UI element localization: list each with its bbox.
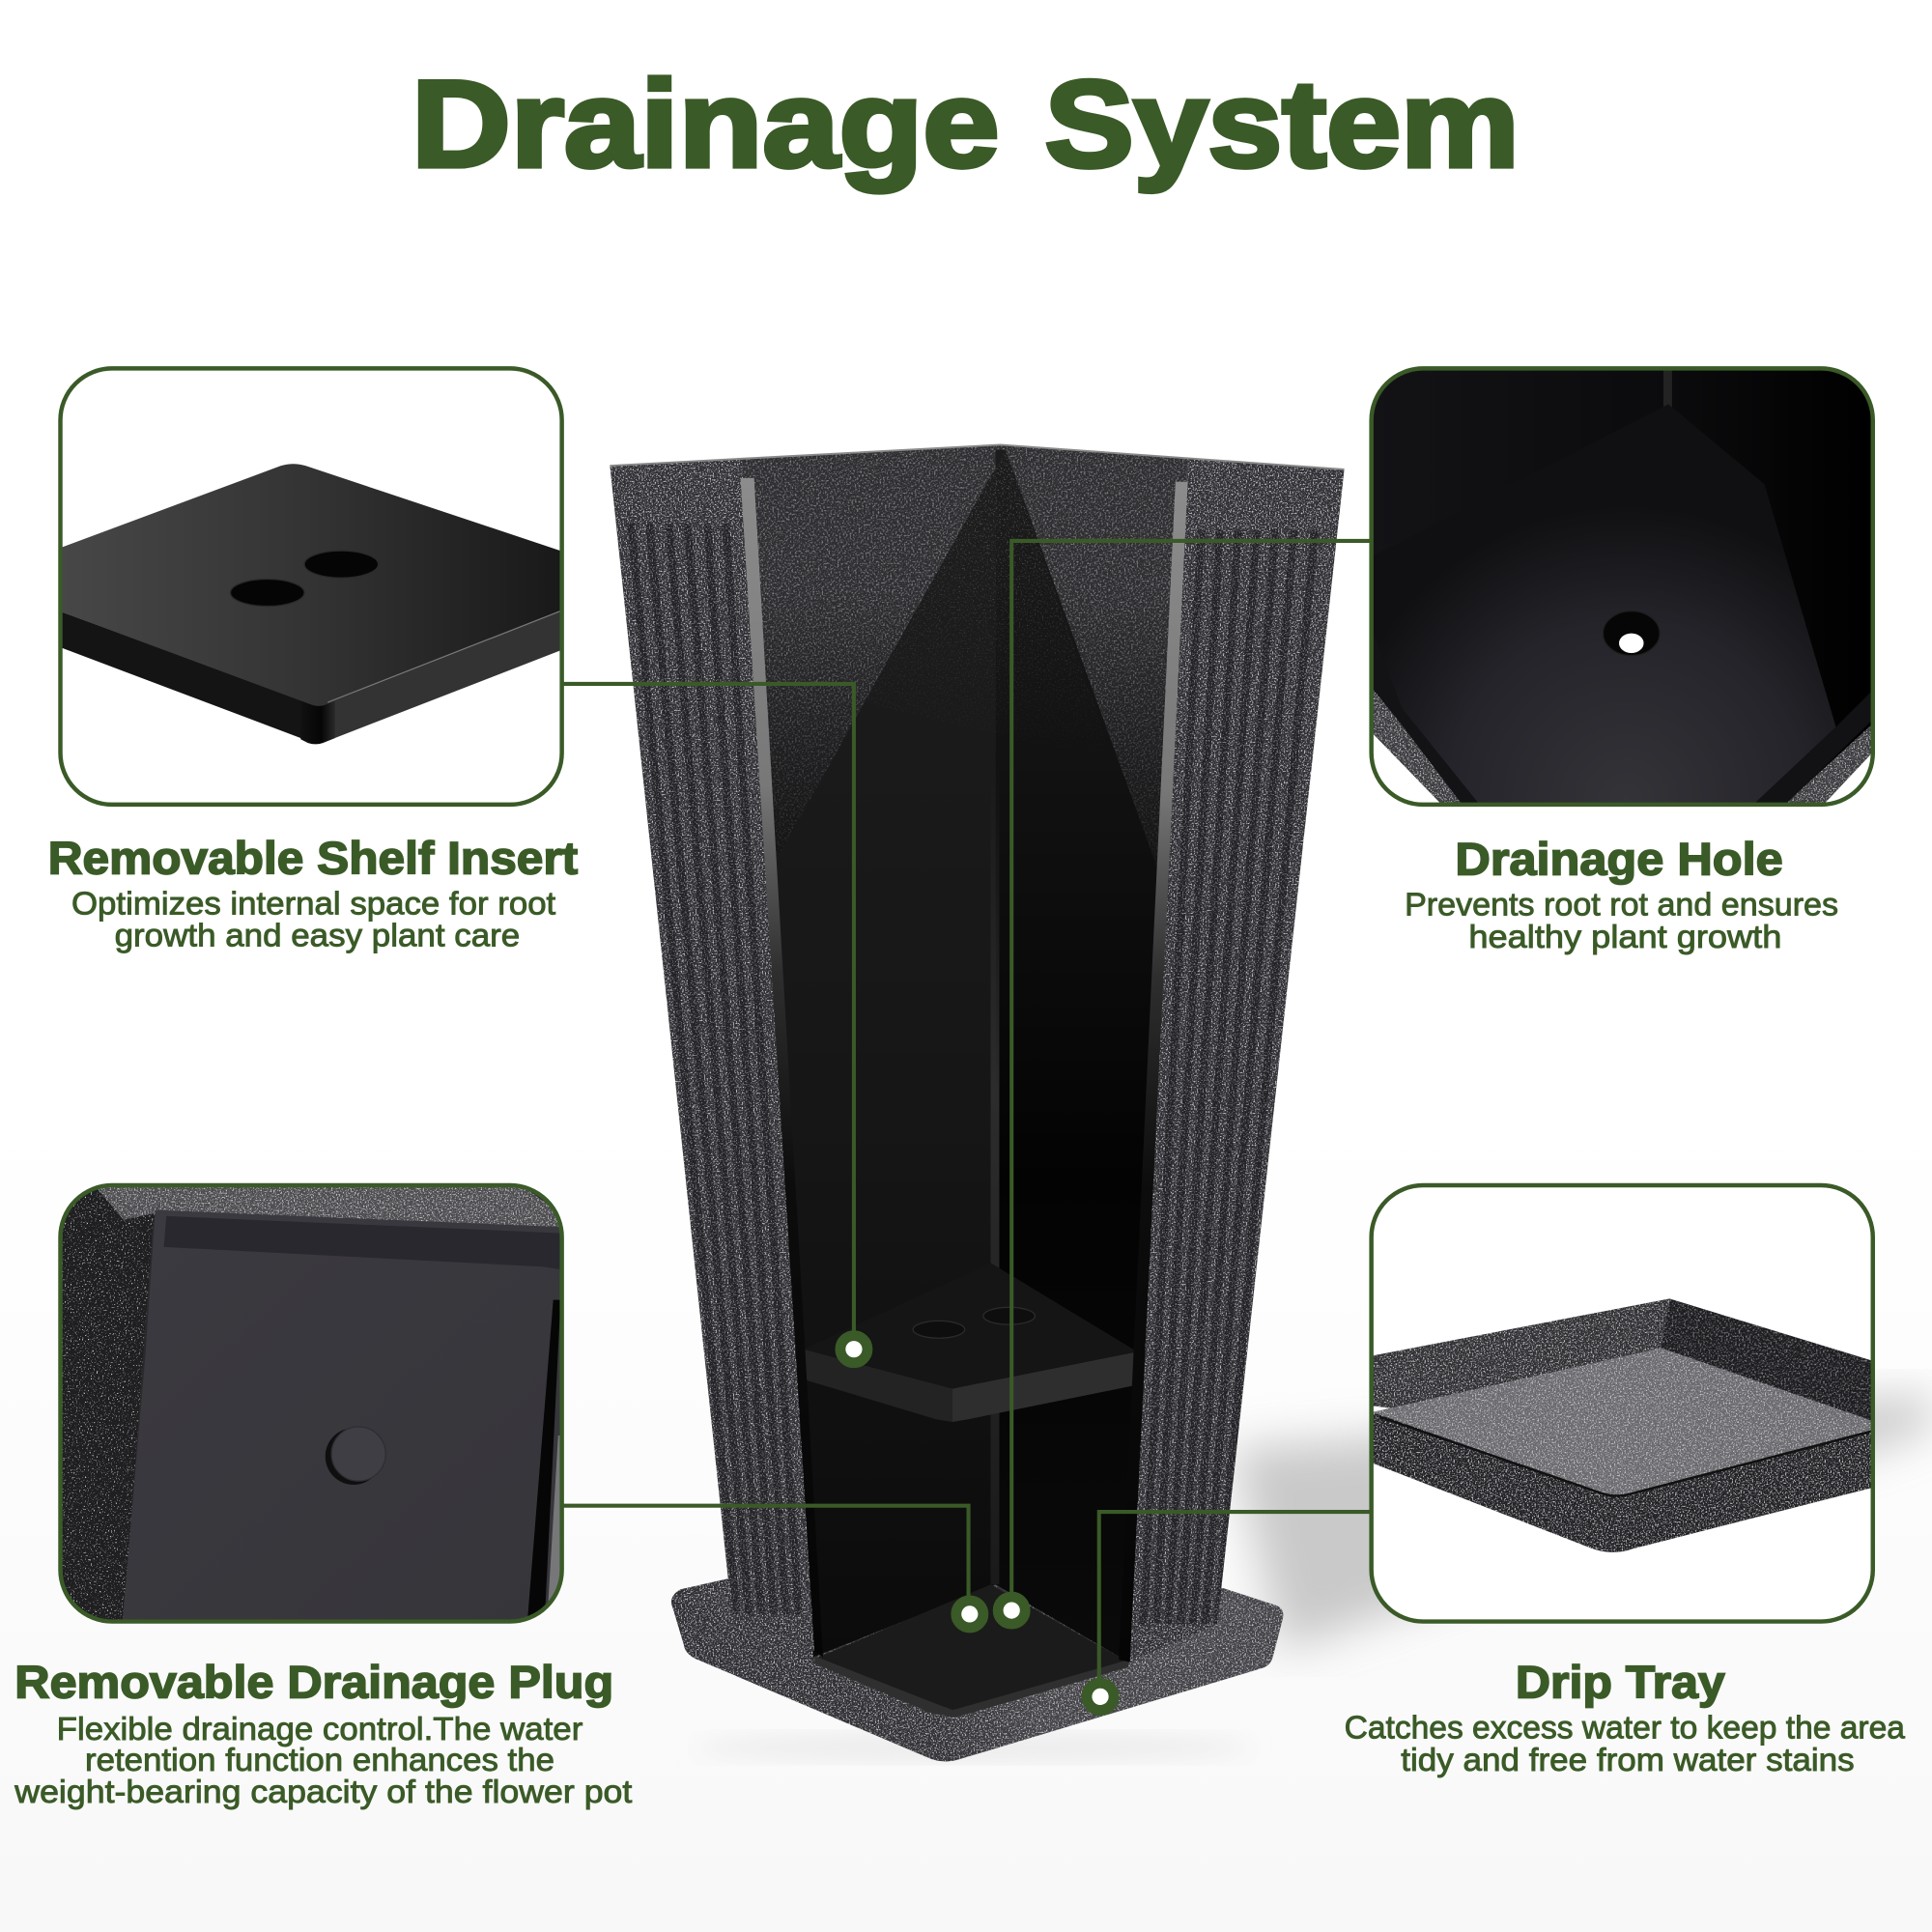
tray inner corner left	[681, 1583, 734, 1619]
tray back wall right	[1661, 1298, 1879, 1430]
speckled rim left	[1374, 690, 1461, 803]
text block: removable shelf insert	[48, 833, 579, 954]
shelf left face	[804, 1350, 952, 1422]
planter cutaway illustration	[610, 444, 1345, 1762]
back wall shade	[754, 591, 1182, 899]
interior left panel	[770, 450, 1006, 1658]
drip tray body	[671, 1578, 1283, 1761]
title	[412, 56, 1520, 193]
title: System	[1045, 56, 1520, 193]
plug recess	[164, 1216, 567, 1270]
text block: removable drainage plug: retention function enhances the	[85, 1743, 554, 1778]
text block: removable drainage plug: Flexible drainage control.The water	[57, 1712, 582, 1747]
tray back wall left	[1361, 1298, 1669, 1409]
text block: removable shelf insert: Removable Shelf Insert	[48, 833, 579, 884]
panel: drainage hole	[1361, 368, 1886, 807]
plate highlight	[327, 611, 560, 703]
pot rim highlight	[610, 444, 1345, 469]
callout line: drainage plug	[562, 1506, 983, 1628]
shelf right face	[952, 1351, 1137, 1422]
text block: drainage hole: healthy plant growth	[1468, 920, 1781, 955]
right light sliver	[547, 1435, 567, 1622]
plug panel	[122, 1210, 567, 1627]
drip tray shadow	[696, 1732, 1251, 1762]
shelf plate left edge	[62, 612, 302, 738]
inner rim line	[1380, 1417, 1879, 1495]
shelf plate corner	[300, 701, 335, 744]
text block: drainage hole	[1405, 835, 1838, 955]
text block: removable drainage plug: Removable Drainage Plug	[14, 1658, 613, 1709]
text block: drainage hole: Prevents root rot and ensures	[1405, 888, 1838, 923]
panel: removable shelf insert	[49, 368, 579, 805]
inner wall lower	[1396, 717, 1464, 803]
panel: removable drainage plug	[55, 1180, 567, 1627]
speckled rim right	[1787, 725, 1871, 803]
speckled wall	[62, 1190, 155, 1619]
tray front wall	[1361, 1408, 1879, 1552]
pot floor	[815, 1584, 1128, 1710]
speckled top band	[99, 1187, 558, 1227]
shelf plate top	[49, 464, 579, 706]
white corner left	[1374, 734, 1439, 803]
cast shadow	[1233, 1395, 1932, 1651]
text block: removable shelf insert: Optimizes internal space for root	[71, 886, 555, 922]
corner seam	[1663, 371, 1672, 408]
text block: drip tray: Catches excess water to keep the area	[1345, 1711, 1905, 1747]
white corner right	[1826, 754, 1870, 802]
callout line: shelf insert	[562, 684, 867, 1363]
left fluted wall	[610, 458, 823, 1658]
callout line: drip tray	[1087, 1512, 1370, 1710]
wedge speckle	[863, 450, 1115, 764]
right dark strip	[527, 1300, 560, 1622]
pot floor	[1372, 404, 1836, 804]
interior right panel	[996, 450, 1164, 1662]
pot back wall	[742, 444, 1188, 1665]
tray inner corner right	[1217, 1591, 1275, 1629]
text block: removable drainage plug: weight-bearing capacity of the flower pot	[14, 1775, 632, 1810]
plate hole one	[231, 579, 304, 607]
text block: drip tray: Drip Tray	[1516, 1658, 1725, 1709]
text block: drainage hole: Drainage Hole	[1455, 835, 1783, 886]
shelf hole two	[983, 1307, 1035, 1324]
callout line: drainage hole	[998, 541, 1370, 1624]
title: Drainage	[412, 56, 999, 193]
text block: drip tray	[1345, 1658, 1905, 1778]
shelf plate right edge	[326, 612, 560, 742]
text block: removable shelf insert: growth and easy plant care	[115, 919, 520, 954]
text block: removable drainage plug	[14, 1658, 632, 1810]
floor lip	[814, 1656, 1128, 1718]
shelf top	[804, 1263, 1137, 1389]
shelf hole one	[913, 1321, 965, 1338]
plate hole two	[304, 551, 379, 578]
plug button	[326, 1428, 382, 1485]
centre seam	[991, 764, 999, 1584]
right fluted wall	[1119, 458, 1345, 1662]
text block: drip tray: tidy and free from water stains	[1401, 1743, 1855, 1778]
tray floor	[1361, 1348, 1879, 1509]
white corner	[524, 1180, 567, 1213]
panel: drip tray	[1361, 1185, 1879, 1622]
drain hole	[1603, 611, 1660, 656]
